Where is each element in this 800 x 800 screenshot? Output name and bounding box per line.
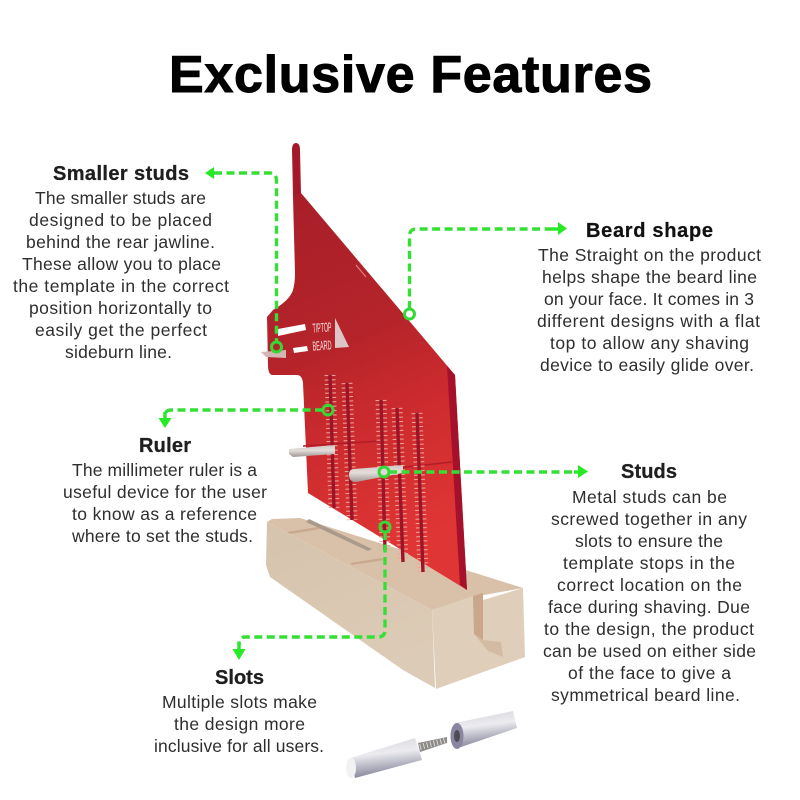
connector: ruler <box>158 405 333 428</box>
text: ruler description <box>63 460 267 546</box>
text: studs description: correct location on the <box>557 575 742 595</box>
connector: slots <box>232 522 390 660</box>
text: beard shape description: different designs with a flat <box>537 311 760 331</box>
connector: studs <box>379 465 588 478</box>
text: studs description: slots to ensure the <box>575 531 723 551</box>
logo: TIPTOP <box>312 319 332 336</box>
text: smaller studs description: The smaller studs are <box>35 188 206 208</box>
text: studs description: of the face to give a <box>568 663 731 683</box>
text: beard shape description <box>537 245 761 375</box>
text: beard shape description: helps shape the beard line <box>542 267 757 287</box>
panel: smaller studs <box>13 163 229 362</box>
text: smaller studs description: These allow you to place <box>22 254 221 274</box>
millimeter ruler slots <box>330 375 423 572</box>
text: beard shape description: device to easily glide over. <box>540 355 754 375</box>
stud right <box>349 465 403 482</box>
wooden base <box>266 518 525 689</box>
panel: studs <box>543 461 756 705</box>
connector: smaller studs <box>205 167 282 352</box>
text: ruler description: to know as a reference <box>72 504 257 524</box>
panel: beard shape <box>537 220 761 375</box>
logo <box>312 318 349 354</box>
heading: beard shape: Beard shape <box>586 220 713 242</box>
text: beard shape description: top to allow any shaving <box>550 333 749 353</box>
text: ruler description: The millimeter ruler is a <box>72 460 257 480</box>
text: studs description: face during shaving. Due <box>548 597 750 617</box>
text: slots description: inclusive for all users. <box>154 736 324 756</box>
stud left <box>289 445 335 457</box>
text: smaller studs description: designed to be placed <box>29 210 212 230</box>
text: studs description: can be used on either side <box>543 641 756 661</box>
text: smaller studs description: position horizontally to <box>29 298 212 318</box>
text: studs description: screwed together in any <box>551 509 747 529</box>
text: studs description <box>543 487 756 705</box>
horizontal slits <box>303 441 452 473</box>
text: smaller studs description: behind the rear jawline. <box>26 232 215 252</box>
text: smaller studs description: sideburn line. <box>65 342 172 362</box>
text: slots description <box>154 692 324 756</box>
panel: slots <box>154 667 324 756</box>
heading: smaller studs: Smaller studs <box>53 163 189 185</box>
text: ruler description: useful device for the user <box>63 482 267 502</box>
product: wooden base and red beard template <box>261 143 525 689</box>
text: slots description: the design more <box>174 714 305 734</box>
heading: studs: Studs <box>621 461 677 483</box>
text: studs description: to the design, the product <box>544 619 754 639</box>
text: slots description: Multiple slots make <box>162 692 317 712</box>
text: smaller studs description: the template in the correct <box>13 276 229 296</box>
panel: ruler <box>63 435 267 546</box>
text: studs description: symmetrical beard line. <box>551 685 740 705</box>
heading: ruler: Ruler <box>139 435 191 457</box>
text: smaller studs description <box>13 188 229 362</box>
small stud <box>261 350 286 358</box>
threaded sleeve <box>455 711 517 748</box>
red template blade <box>267 143 467 590</box>
heading: slots: Slots <box>215 667 264 689</box>
text: beard shape description: The Straight on the product <box>538 245 761 265</box>
text: beard shape description: on your face. It comes in 3 <box>544 289 754 309</box>
title: Exclusive Features <box>169 46 652 104</box>
text: ruler description: where to set the studs. <box>71 526 253 546</box>
threaded stud <box>418 737 447 752</box>
text: smaller studs description: easily get the perfect <box>35 320 207 340</box>
connector: beard shape <box>404 222 567 319</box>
upper white slots <box>278 324 306 336</box>
screw studs hardware <box>346 711 517 778</box>
text: studs description: template stops in the <box>563 553 735 573</box>
logo: BEARD <box>312 337 332 354</box>
text: studs description: Metal studs can be <box>572 487 727 507</box>
